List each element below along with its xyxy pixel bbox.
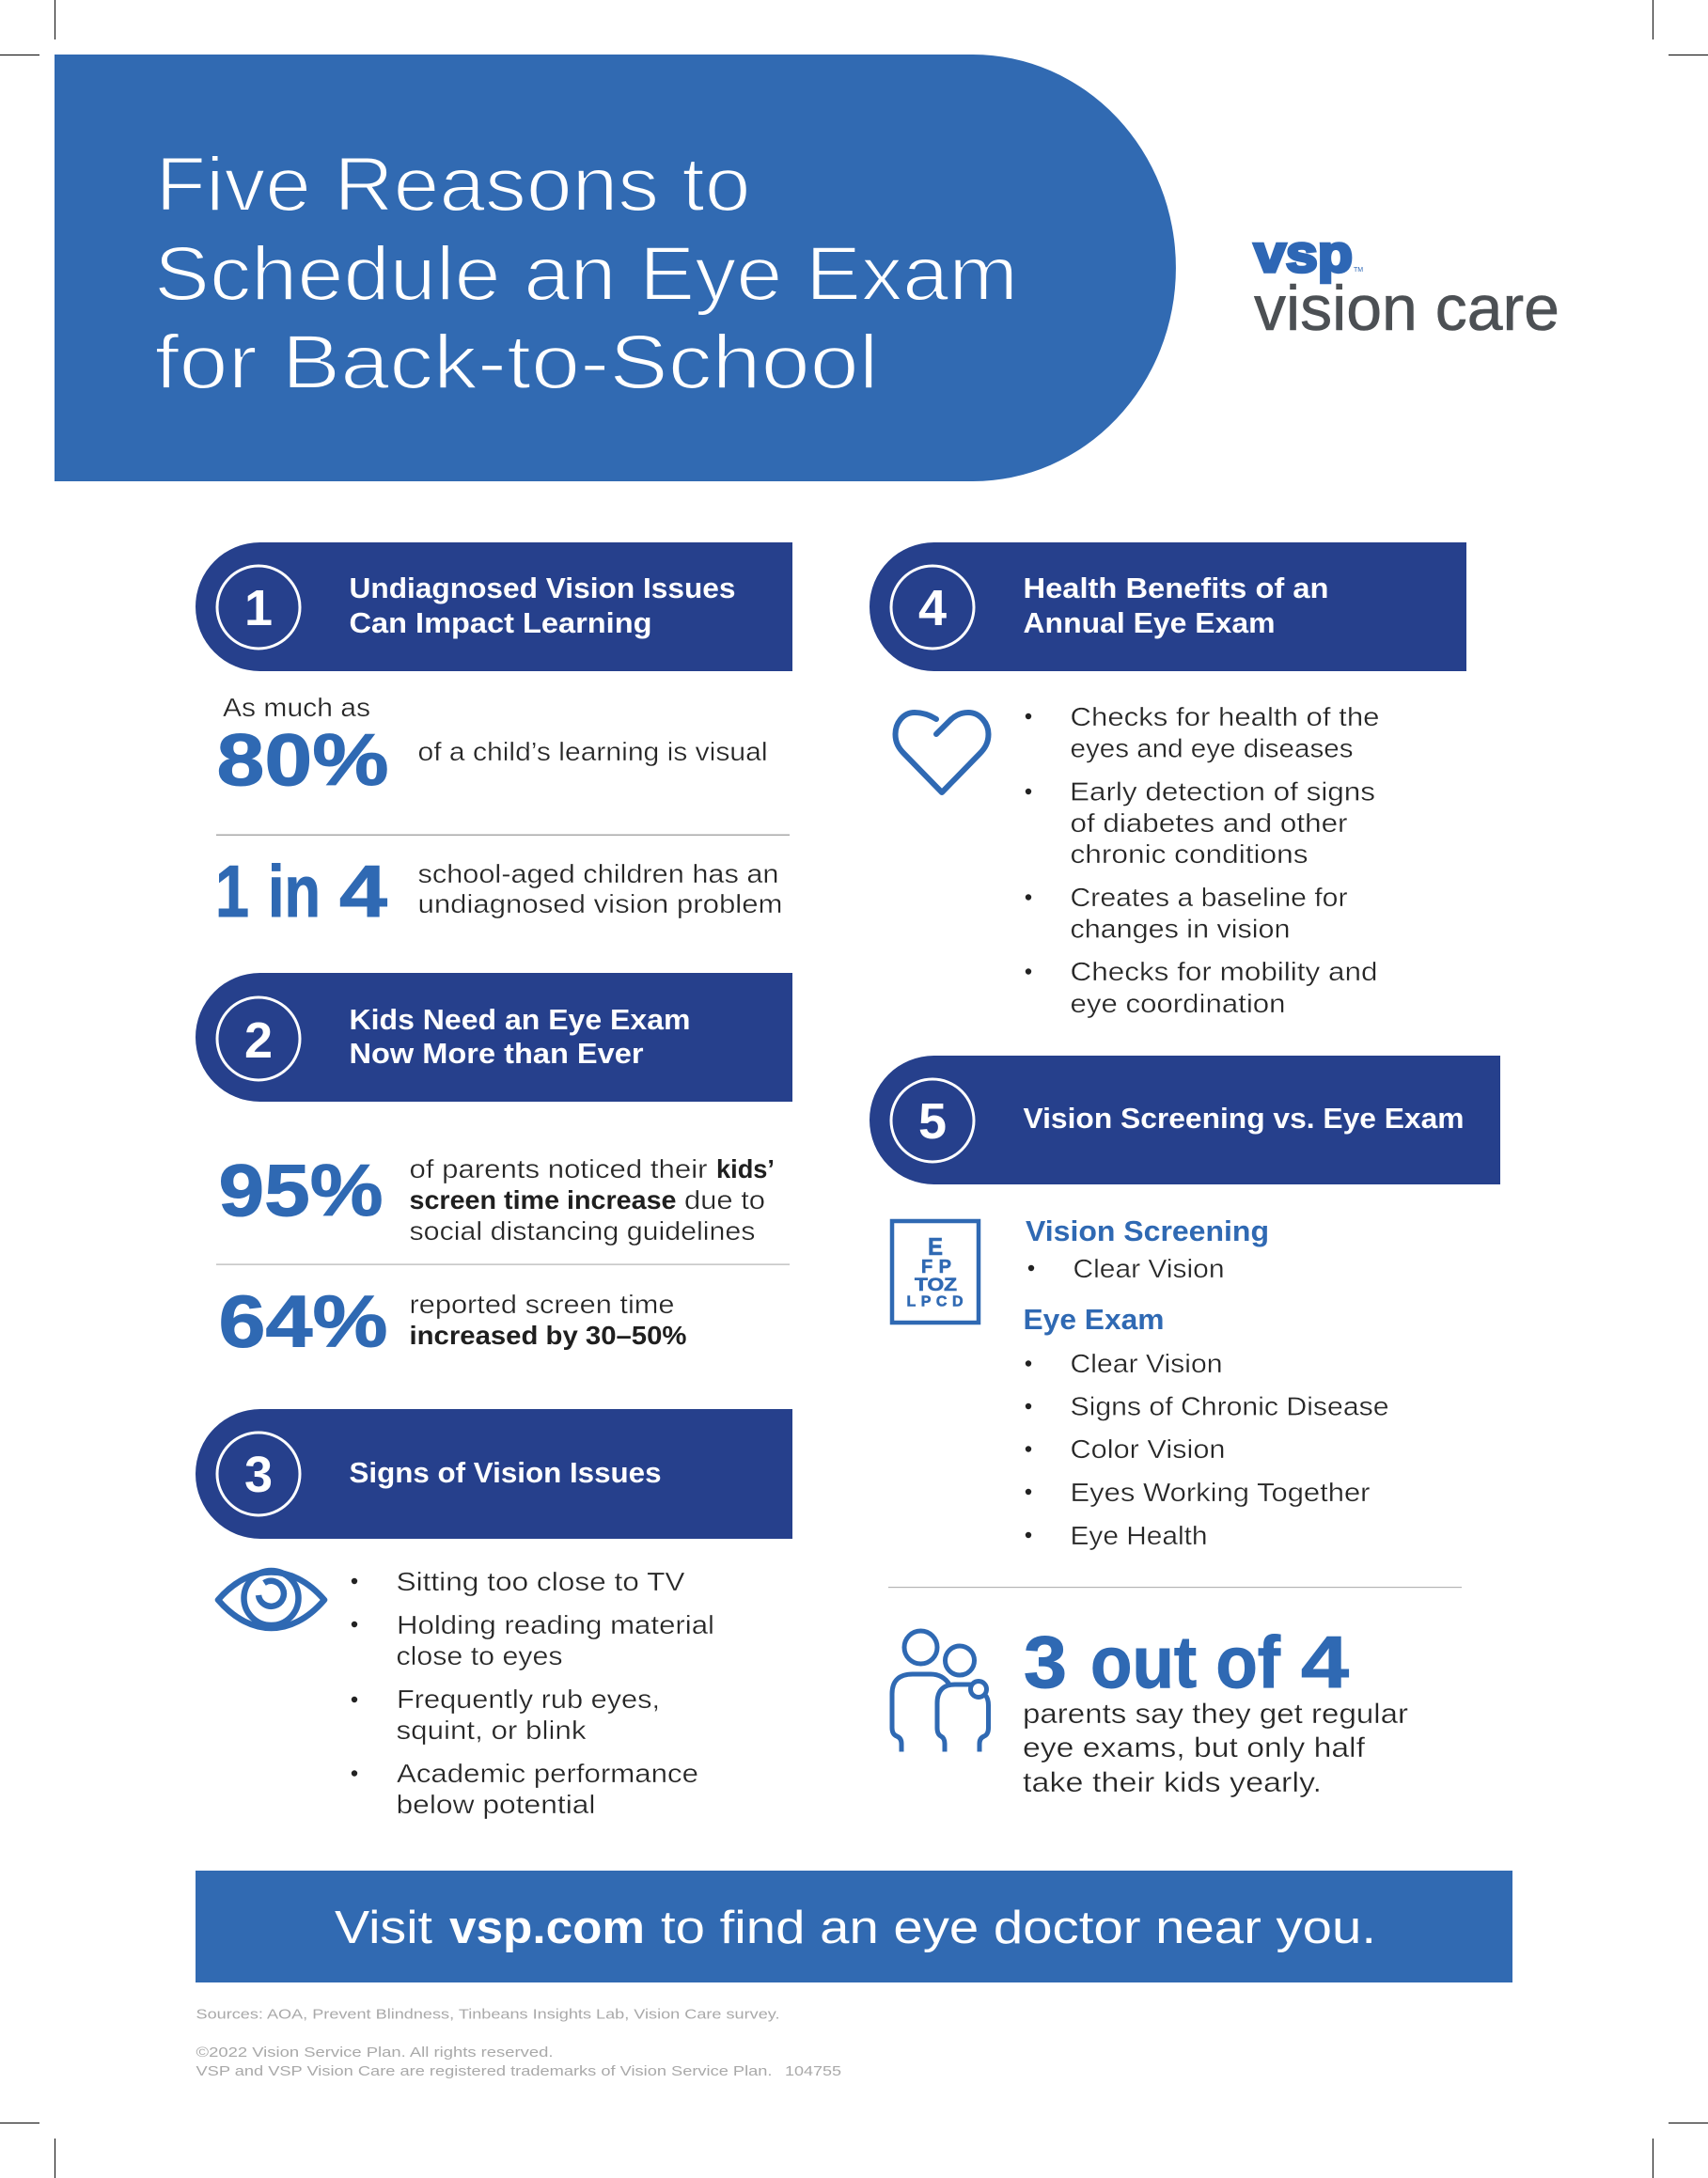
stat: 95 percent: screen time increase xyxy=(410,1185,677,1214)
bullet list: benefits: chronic conditions xyxy=(1070,839,1308,869)
stat: 95 percent: due to xyxy=(684,1185,765,1214)
logo: VSP Vision Care xyxy=(1254,224,1559,344)
banner 2: Kids Need an Eye Exam xyxy=(350,1003,690,1036)
bullet list: benefits: changes in vision xyxy=(1070,914,1290,944)
bullet list: benefits: of diabetes and other xyxy=(1070,808,1348,838)
list: eye exam items: Eyes Working Together xyxy=(1070,1478,1371,1507)
list: eye exam items: Clear Vision xyxy=(1070,1349,1222,1378)
icon: heart xyxy=(895,713,989,792)
bullet list: signs: Holding reading material xyxy=(397,1610,714,1639)
stat: 64 percent xyxy=(218,1280,687,1363)
stat: 1 in 4: in xyxy=(268,850,321,932)
stat: 64 percent: reported screen time xyxy=(410,1290,675,1319)
header panel xyxy=(55,55,1176,481)
bullet list: signs xyxy=(352,1567,714,1819)
stat: 80 percent: 80% xyxy=(216,718,389,801)
stat: 3 out of 4: parents say they get regular xyxy=(1023,1699,1408,1730)
stat: 95 percent: social distancing guidelines xyxy=(410,1216,756,1246)
stat: 80 percent: As much as xyxy=(223,693,370,722)
call to action banner: vsp.com xyxy=(449,1903,645,1953)
stat: 80 percent xyxy=(216,693,767,801)
stat: 95 percent: of parents noticed their xyxy=(410,1154,707,1183)
panel 5: vision screening vs eye exam xyxy=(870,1056,1500,1798)
banner 3: Signs of Vision Issues xyxy=(350,1456,662,1489)
stat: 3 out of 4: out of xyxy=(1090,1621,1281,1703)
panel 1: undiagnosed vision issues xyxy=(196,542,792,932)
footer: sources and legal: 104755 xyxy=(785,2063,841,2079)
logo: VSP Vision Care: vision care xyxy=(1254,273,1559,344)
banner 4: 4 xyxy=(918,580,947,636)
banner 1: Undiagnosed Vision Issues xyxy=(350,572,735,604)
panel 2: kids need an eye exam xyxy=(196,973,792,1363)
stat: 3 out of 4: eye exams, but only half xyxy=(1023,1732,1366,1763)
bullet list: signs: Academic performance xyxy=(397,1759,698,1788)
bullet list: benefits: eyes and eye diseases xyxy=(1070,733,1354,763)
stat: 3 out of 4: 4 xyxy=(1301,1621,1349,1703)
banner 2: 2 xyxy=(244,1012,273,1069)
banner 4 xyxy=(870,542,1466,671)
logo: VSP Vision Care: TM xyxy=(1354,267,1363,274)
logo: VSP Vision Care: vsp xyxy=(1254,224,1353,283)
stat: 1 in 4: school-aged children has an xyxy=(417,859,778,888)
bullet list: benefits: Early detection of signs xyxy=(1070,776,1375,807)
icon: parent and child xyxy=(892,1631,989,1752)
list: vision screening items: Clear Vision xyxy=(1073,1254,1224,1283)
stat: 1 in 4 xyxy=(215,850,782,932)
call to action banner: to find an eye doctor near you. xyxy=(661,1903,1376,1953)
stat: 95 percent: kids’ xyxy=(716,1154,775,1183)
banner 5 xyxy=(870,1056,1500,1184)
bullet list: benefits: Checks for health of the xyxy=(1070,702,1380,731)
list: eye exam items xyxy=(1026,1349,1389,1550)
title: for Back-to-School xyxy=(154,320,878,405)
banner 5: Vision Screening vs. Eye Exam xyxy=(1023,1102,1465,1135)
list: eye exam items: Color Vision xyxy=(1070,1434,1226,1464)
stat: 64 percent: increased by 30–50% xyxy=(410,1321,687,1350)
icon: eye chart: E xyxy=(928,1232,943,1261)
banner 2: Now More than Ever xyxy=(350,1037,643,1070)
stat: 1 in 4: 1 xyxy=(215,850,249,932)
list: eye exam items: Eye Health xyxy=(1070,1521,1207,1550)
footer: sources and legal: VSP and VSP Vision Care are registered trademarks of Vision Service Plan. xyxy=(196,2063,773,2079)
icon: eye xyxy=(218,1571,324,1628)
title: Schedule an Eye Exam xyxy=(154,231,1018,317)
stat: 1 in 4: 4 xyxy=(339,850,387,932)
banner 4: Annual Eye Exam xyxy=(1023,606,1275,639)
footer: sources and legal: ©2022 Vision Service Plan. All rights reserved. xyxy=(196,2045,553,2060)
icon: eye chart xyxy=(892,1221,979,1323)
panel 4: health benefits xyxy=(870,542,1466,1018)
banner 1: Can Impact Learning xyxy=(350,606,652,639)
heading: eye exam: Eye Exam xyxy=(1023,1303,1164,1336)
bullet list: signs: close to eyes xyxy=(397,1641,562,1670)
banner 5: 5 xyxy=(918,1093,947,1150)
footer: sources and legal: Sources: AOA, Prevent Blindness, Tinbeans Insights Lab, Vision Care survey. xyxy=(196,2006,780,2023)
banner 2 xyxy=(196,973,792,1102)
bullet list: signs: Frequently rub eyes, xyxy=(397,1684,660,1714)
bullet list: benefits: Creates a baseline for xyxy=(1070,883,1348,912)
stat: 64 percent: 64% xyxy=(218,1280,387,1363)
footer: sources and legal xyxy=(196,2006,841,2079)
bullet list: benefits xyxy=(1026,702,1380,1018)
stat: 95 percent: 95% xyxy=(218,1149,384,1231)
stat: 80 percent: of a child’s learning is visual xyxy=(417,737,767,766)
icon: eye chart: TOZ xyxy=(915,1276,957,1295)
banner 3: 3 xyxy=(244,1447,273,1503)
banner 1: 1 xyxy=(244,580,273,636)
bullet list: signs: below potential xyxy=(397,1790,596,1819)
bullet list: signs: Sitting too close to TV xyxy=(397,1567,685,1596)
banner 3 xyxy=(196,1409,792,1539)
heading: vision screening: Vision Screening xyxy=(1026,1214,1269,1247)
bullet list: benefits: eye coordination xyxy=(1070,989,1286,1018)
call to action banner xyxy=(196,1871,1512,1982)
list: eye exam items: Signs of Chronic Disease xyxy=(1070,1391,1389,1421)
banner 1 xyxy=(196,542,792,671)
stat: 3 out of 4: 3 xyxy=(1024,1621,1067,1703)
stat: 1 in 4: undiagnosed vision problem xyxy=(417,889,782,918)
title: Five Reasons to xyxy=(156,142,751,227)
title xyxy=(154,142,1018,405)
bullet list: signs: squint, or blink xyxy=(397,1716,588,1745)
icon: eye chart: LPCD xyxy=(906,1293,963,1310)
panel 3: signs of vision issues xyxy=(196,1409,792,1819)
stat: 3 out of 4 xyxy=(1023,1621,1408,1798)
bullet list: benefits: Checks for mobility and xyxy=(1070,957,1378,986)
icon: eye chart: F P xyxy=(921,1257,951,1277)
stat: 3 out of 4: take their kids yearly. xyxy=(1023,1767,1322,1798)
banner 4: Health Benefits of an xyxy=(1023,572,1329,604)
call to action banner: Visit xyxy=(335,1903,432,1953)
stat: 95 percent xyxy=(218,1149,775,1246)
